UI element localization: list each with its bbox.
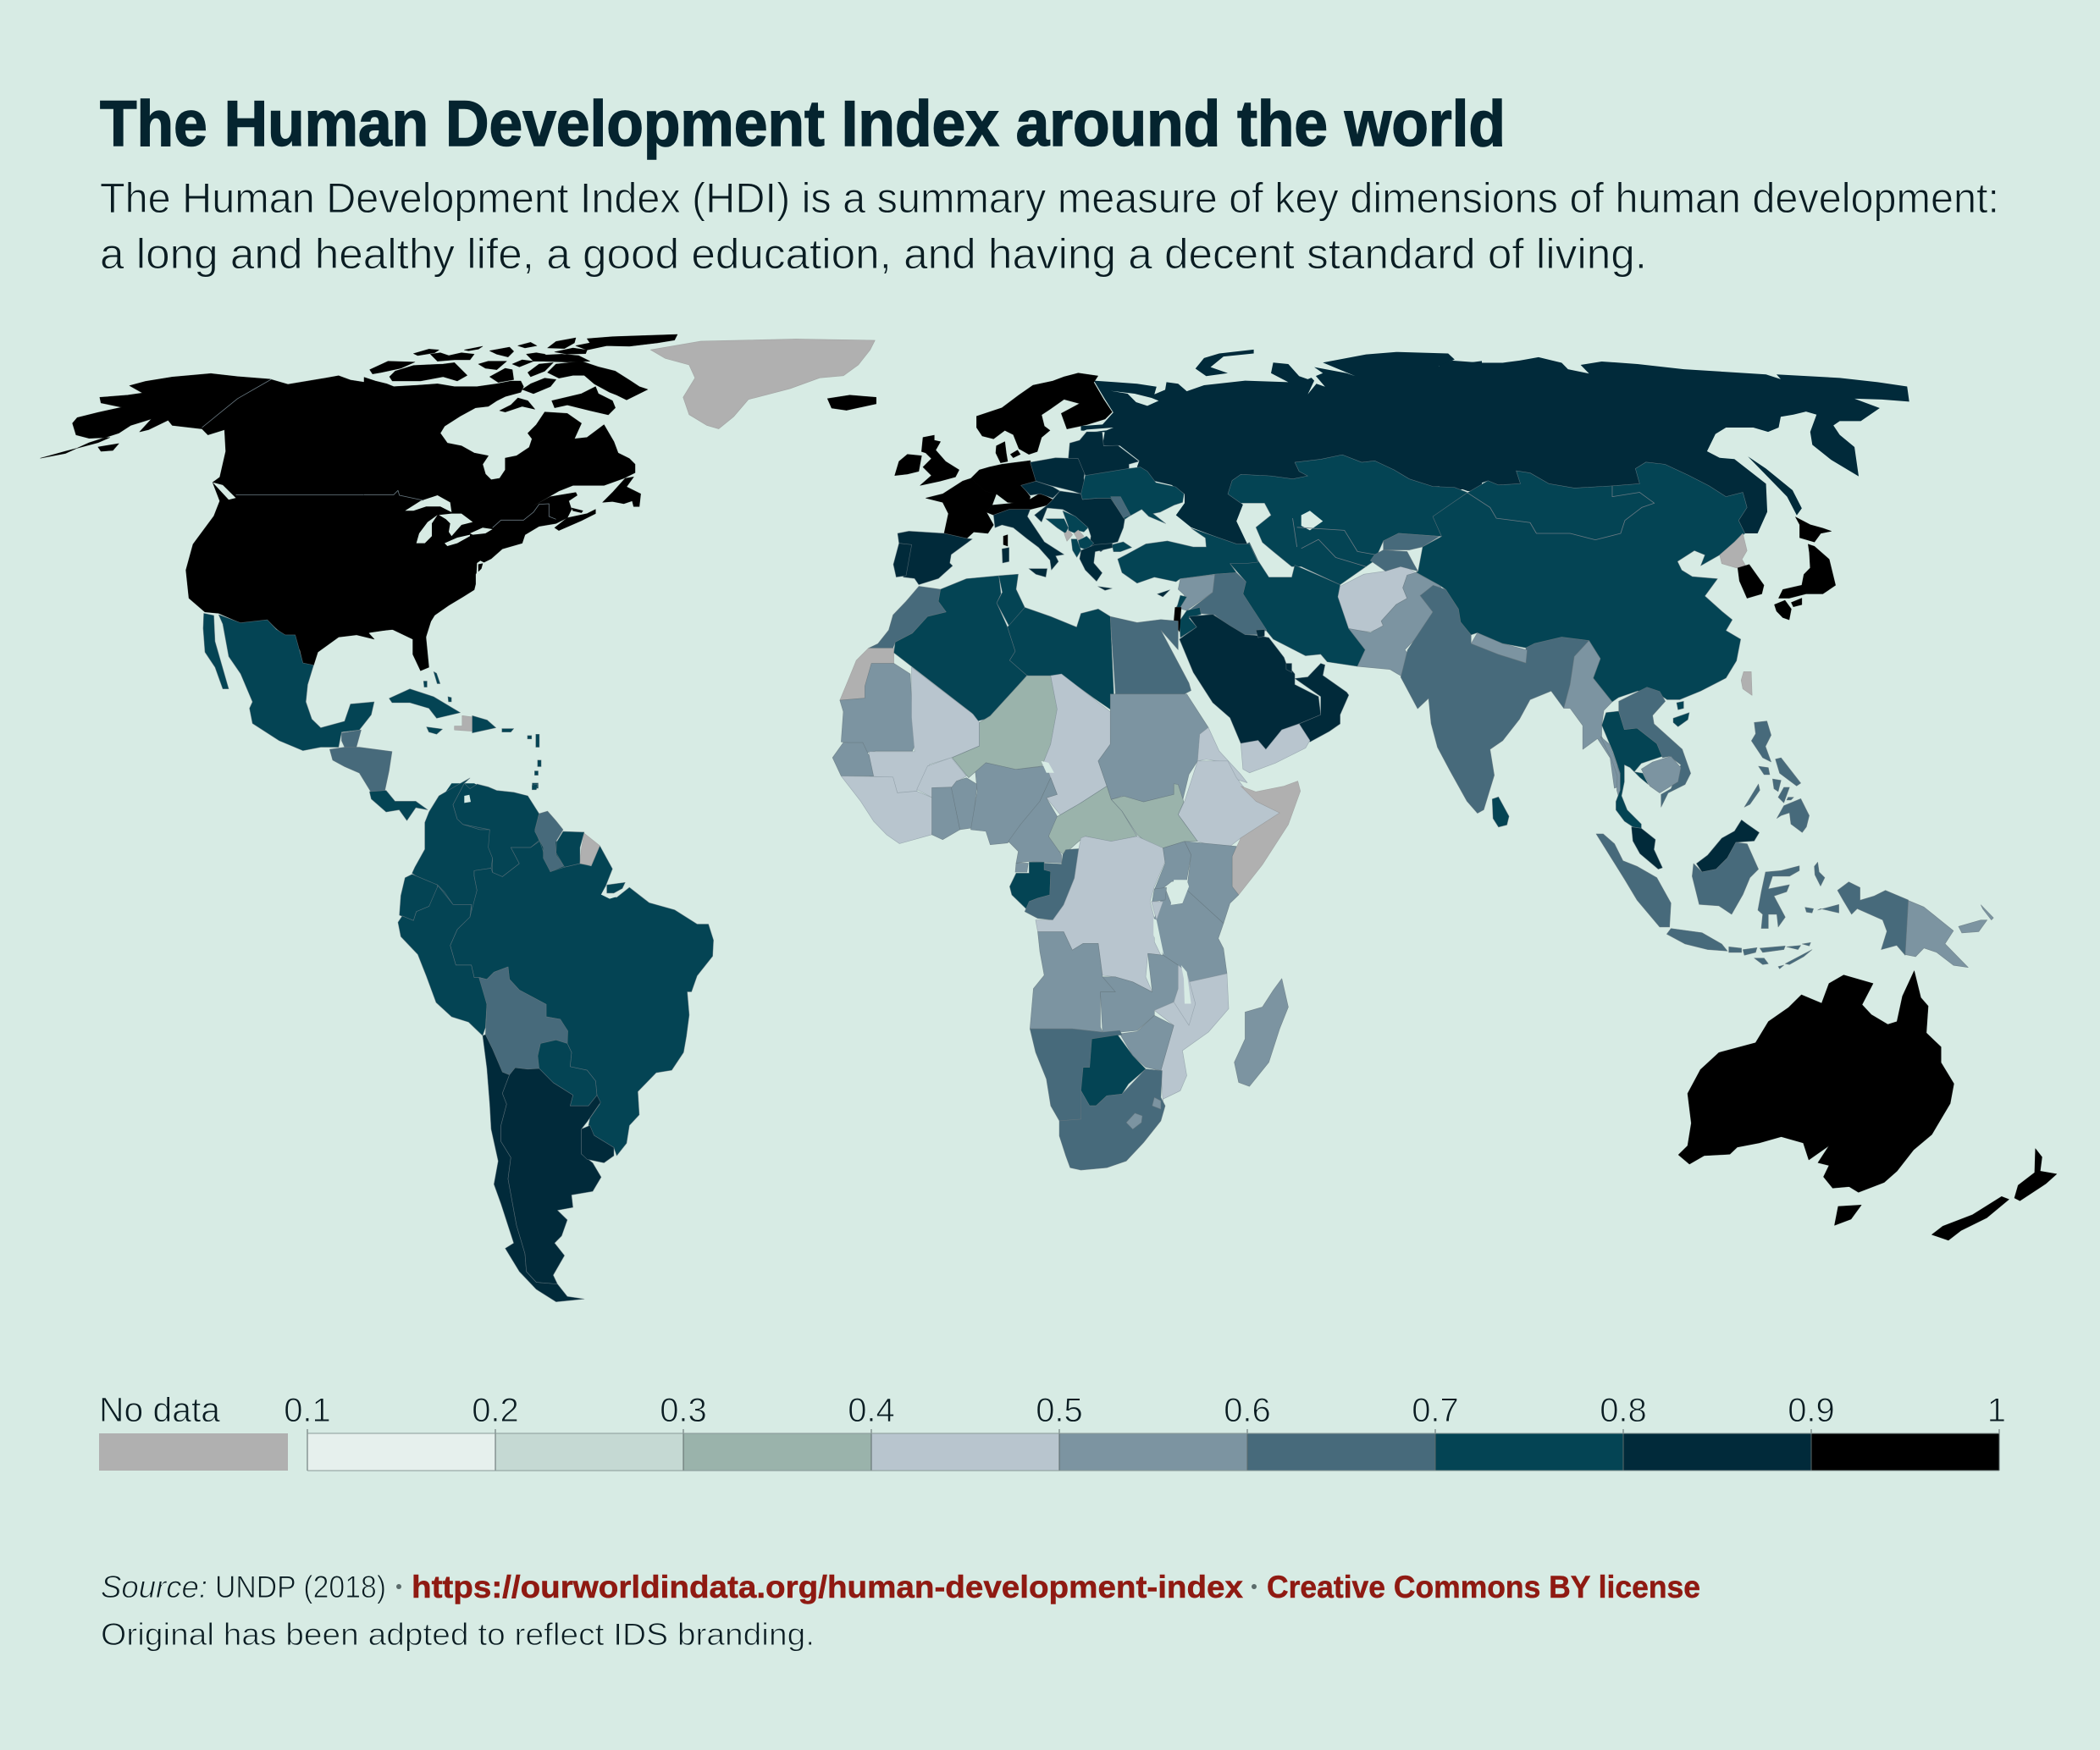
South Korea — [1738, 565, 1764, 599]
Ukraine — [1081, 467, 1184, 523]
Venezuela — [453, 783, 539, 877]
Myanmar tail — [1600, 737, 1623, 798]
footer source line: Creative Commons BY license — [1267, 1570, 1700, 1604]
Central and southeast Europe — [1035, 491, 1125, 552]
North America west and south — [41, 339, 876, 820]
Vancouver strait — [213, 483, 235, 500]
Switzerland — [986, 504, 1009, 515]
Thrace — [1112, 542, 1132, 552]
Jordan — [1180, 607, 1201, 638]
Qatar — [1286, 664, 1292, 672]
Nepal — [1471, 632, 1527, 663]
Marajo island — [607, 882, 625, 893]
Botswana — [1081, 1035, 1146, 1106]
Ireland — [895, 455, 921, 476]
Indonesia — [1596, 834, 1909, 969]
Sudan — [1098, 694, 1208, 802]
Denmark — [996, 442, 1020, 463]
Central America — [329, 730, 428, 820]
Morocco — [869, 586, 946, 649]
legend labels: 0.7 — [1412, 1392, 1459, 1429]
Tunisia — [997, 574, 1025, 627]
Italy — [993, 510, 1064, 577]
Ghana — [932, 787, 960, 840]
Belarus and Baltics — [1069, 432, 1139, 476]
Austria — [1008, 494, 1053, 510]
map: Russia — [1081, 350, 1909, 544]
Congo — [1025, 848, 1079, 920]
Czechia — [1021, 481, 1060, 498]
Kyrgyzstan — [1384, 533, 1440, 550]
legend labels: 0.2 — [472, 1392, 519, 1429]
Albania — [1071, 539, 1081, 557]
Malawi — [1174, 965, 1196, 1025]
Russia west — [1081, 350, 1482, 544]
Papua New Guinea — [1905, 901, 1993, 968]
Lesotho — [1126, 1113, 1142, 1129]
Japan — [1775, 517, 1836, 620]
legend labels: 0.1 — [284, 1392, 331, 1429]
UAE and Oman — [1295, 664, 1349, 742]
Amazon mouth cut — [601, 886, 616, 899]
legend labels: 0.5 — [1036, 1392, 1083, 1429]
Namibia — [1030, 1029, 1122, 1121]
White Sea — [1111, 391, 1158, 406]
Colombia — [412, 778, 493, 915]
Iran — [1228, 543, 1365, 666]
footer note: Original has been adpted to reflect IDS branding. — [101, 1617, 815, 1652]
map: South America — [398, 778, 714, 1302]
Alaska, western Canada and United States — [41, 373, 431, 671]
map: North America — [41, 334, 876, 820]
eastern borders — [364, 490, 556, 527]
Lake Chad — [1042, 761, 1054, 773]
France — [926, 478, 997, 538]
South Sudan — [1111, 784, 1197, 848]
subtitle — [100, 174, 1999, 278]
Iraq — [1189, 572, 1267, 635]
Angola — [1030, 932, 1115, 1032]
legend labels: 1 — [1987, 1392, 2006, 1429]
Ecuador — [400, 875, 438, 920]
map: Southeast Asia — [1596, 687, 1909, 969]
Cyprus — [1158, 590, 1170, 597]
Caribbean — [389, 671, 541, 788]
French Guiana — [580, 833, 600, 865]
Syria — [1176, 574, 1219, 610]
Turkey and Caucasus — [1118, 528, 1258, 583]
Mauritania — [840, 664, 916, 753]
legend labels — [99, 1390, 2006, 1429]
Algeria — [894, 576, 1027, 722]
footer source line: https://ourworldindata.org/human-development-index — [412, 1570, 1243, 1604]
Hainan — [1673, 701, 1689, 726]
Equatorial Guinea — [1015, 863, 1028, 872]
Lake Malawi — [1181, 965, 1191, 1004]
Egypt — [1110, 616, 1191, 695]
Myanmar — [1564, 641, 1624, 788]
Zambia — [1100, 953, 1178, 1032]
footer source line — [101, 1570, 1700, 1604]
DR Congo — [1036, 836, 1165, 992]
Mozambique — [1154, 974, 1229, 1102]
map: East and South Asia — [1401, 462, 1993, 968]
Somalia — [1232, 781, 1301, 895]
Yemen — [1241, 724, 1310, 773]
legend labels: 0.3 — [660, 1392, 707, 1429]
legend labels: 0.6 — [1224, 1392, 1271, 1429]
Pakistan — [1349, 572, 1444, 677]
North Macedonia — [1078, 536, 1094, 549]
Israel — [1174, 607, 1181, 632]
Libya — [1008, 607, 1114, 712]
Bosnia — [1046, 519, 1069, 533]
Thailand and northern Malaysia — [1602, 711, 1662, 828]
North Korea — [1720, 533, 1747, 568]
footer source line: Source: — [101, 1570, 207, 1604]
New Zealand — [1931, 1149, 2057, 1240]
subtitle: a long and healthy life, a good education, and having a decent standard of living. — [100, 230, 1647, 278]
Suriname — [556, 831, 584, 867]
Montenegro — [1064, 531, 1073, 541]
western borders — [202, 379, 380, 495]
legend — [99, 1390, 2006, 1471]
Atlantic Canada — [555, 477, 641, 531]
Greece — [1080, 544, 1114, 582]
Russia east — [1440, 357, 1909, 533]
legend labels: 0.9 — [1788, 1392, 1835, 1429]
Afghanistan — [1338, 565, 1416, 632]
Eritrea — [1197, 727, 1247, 783]
Arctic islands — [370, 334, 677, 415]
United Kingdom — [920, 435, 959, 485]
Senegal — [832, 743, 874, 776]
Guyana — [535, 811, 564, 872]
South Africa — [1059, 1069, 1165, 1170]
map: Sub-Saharan Africa — [832, 667, 1301, 1170]
Uganda — [1154, 842, 1191, 890]
Sri Lanka — [1492, 797, 1509, 827]
Greenland — [650, 339, 875, 429]
northern land underlay — [423, 783, 593, 940]
Brazil — [450, 841, 714, 1156]
Western Sahara — [840, 649, 894, 700]
Mexico — [203, 613, 374, 751]
Burundi — [1152, 902, 1163, 920]
map: Europe — [893, 373, 1184, 597]
footer source line: UNDP (2018) — [215, 1570, 386, 1604]
Central African Republic — [1048, 787, 1137, 855]
subtitle: The Human Development Index (HDI) is a summary measure of key dimensions of human development: — [100, 174, 1999, 222]
legend labels: 0.8 — [1600, 1392, 1647, 1429]
China and Mongolia — [1416, 462, 1747, 702]
Kuwait — [1256, 630, 1264, 638]
Central Asia borders — [1293, 518, 1374, 566]
Australia — [1678, 971, 1954, 1192]
Trinidad — [532, 784, 538, 790]
Peninsular Malaysia — [1632, 827, 1662, 869]
Saudi Arabia — [1180, 615, 1321, 749]
Poland — [1031, 458, 1086, 494]
Madagascar — [1235, 979, 1288, 1086]
Central Asia — [1228, 455, 1467, 585]
Argentina — [501, 1068, 601, 1284]
map: Middle East, Central Asia and North Africa — [840, 455, 1467, 773]
Tasmania — [1834, 1205, 1861, 1225]
Lake Tanganyika — [1153, 919, 1163, 955]
Kosovo — [1074, 530, 1084, 540]
Portugal — [893, 544, 912, 577]
Germany and Benelux — [971, 461, 1036, 504]
Mali — [870, 667, 980, 792]
Scandinavia — [976, 373, 1112, 455]
Chile — [483, 1035, 584, 1302]
Philippines — [1744, 721, 1810, 832]
Gulf of Finland — [1078, 428, 1114, 440]
Guinea to Ivory Coast — [841, 776, 934, 844]
Iceland — [827, 395, 876, 411]
Tajikistan — [1370, 550, 1418, 571]
Great Lakes — [405, 495, 493, 575]
Laos and Vietnam — [1619, 687, 1691, 807]
Uruguay — [582, 1125, 614, 1163]
Cambodia — [1641, 756, 1681, 793]
Borneo — [1692, 820, 1760, 914]
Nigeria — [970, 763, 1051, 845]
Zimbabwe — [1119, 1015, 1174, 1071]
Lake Maracaibo — [464, 795, 471, 803]
Rwanda — [1152, 887, 1167, 902]
map: Oceania — [1678, 971, 2057, 1240]
world map — [41, 334, 2057, 1302]
Tanzania — [1154, 888, 1227, 982]
Lebanon — [1177, 595, 1187, 607]
Paraguay — [538, 1040, 597, 1106]
North America east and Arctic — [364, 334, 677, 639]
legend swatches — [99, 1429, 1999, 1471]
Peru — [398, 886, 487, 1035]
Serbia — [1063, 511, 1088, 533]
Ethiopia — [1178, 761, 1279, 850]
Eswatini — [1152, 1097, 1161, 1109]
Mongolia border — [1467, 486, 1655, 540]
India — [1401, 585, 1589, 814]
Cameroon — [1009, 778, 1062, 863]
Gabon — [1009, 862, 1051, 912]
Burkina Faso — [917, 758, 966, 798]
Niger — [952, 676, 1057, 778]
Aral Sea — [1301, 511, 1323, 530]
Moldova — [1111, 497, 1130, 518]
legend labels: No data — [99, 1390, 220, 1429]
Bolivia — [479, 967, 568, 1075]
eastern Canada and eastern United States — [364, 378, 635, 639]
Taiwan — [1741, 671, 1752, 695]
Chad — [1042, 674, 1111, 816]
Togo and Benin — [951, 778, 977, 830]
Lake Victoria — [1171, 880, 1189, 905]
Spain — [898, 531, 972, 585]
Crete — [1098, 587, 1112, 590]
Aleutian island — [98, 444, 119, 451]
title: The Human Development Index around the world — [100, 88, 1506, 160]
Kenya — [1185, 842, 1239, 924]
legend labels: 0.4 — [848, 1392, 895, 1429]
